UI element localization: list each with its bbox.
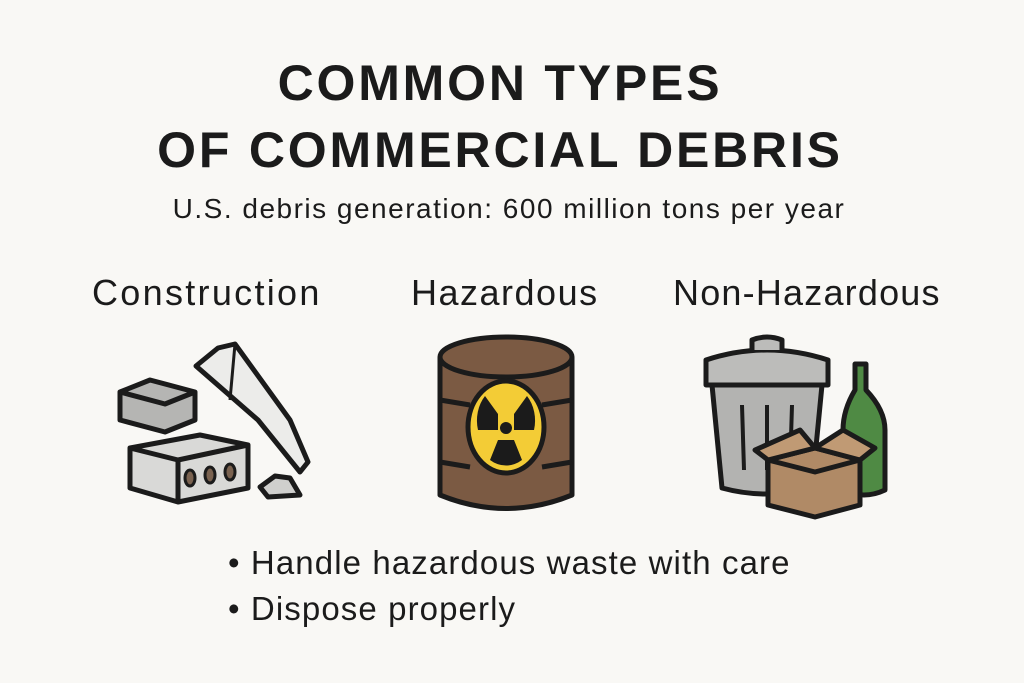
title: OF COMMERCIAL DEBRIS: [157, 122, 843, 178]
icon: hazardous barrel: [440, 337, 572, 508]
title: [157, 55, 843, 178]
heading: non-hazardous: Non-Hazardous: [673, 272, 941, 313]
heading: hazardous: Hazardous: [411, 272, 599, 313]
bullet list: • Handle hazardous waste with care: [228, 544, 791, 581]
title: COMMON TYPES: [278, 55, 722, 111]
bullet list: [228, 544, 791, 627]
icon: trash can, bottle, box: [706, 337, 885, 517]
bullet list: • Dispose properly: [228, 590, 516, 627]
subtitle: U.S. debris generation: 600 million tons per year: [173, 193, 845, 224]
heading: construction: Construction: [92, 272, 322, 313]
icon: construction debris: [120, 344, 308, 502]
